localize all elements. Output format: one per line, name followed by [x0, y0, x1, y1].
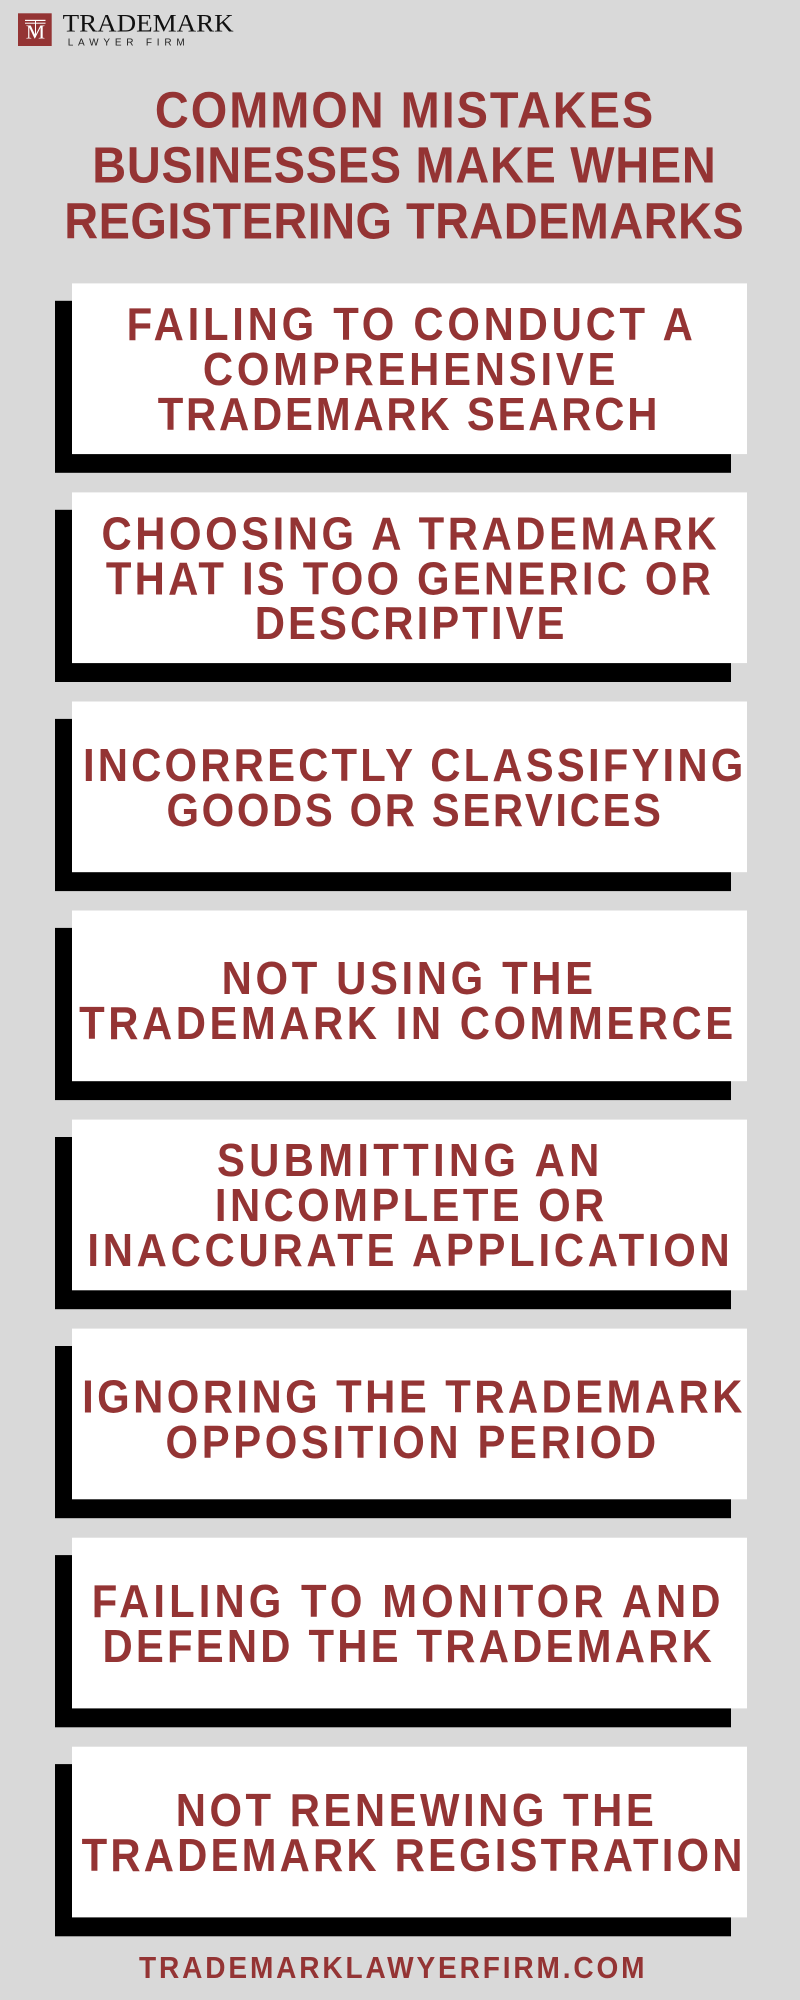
text: mistake 7: DEFEND THE TRADEMARK: [102, 1621, 712, 1672]
panel: mistake 6: [55, 1329, 747, 1518]
text: mistake 7: [92, 1576, 721, 1672]
logo: [18, 11, 234, 48]
title: REGISTERING TRADEMARKS: [64, 194, 744, 250]
icon: TM monogram: [18, 13, 52, 46]
panel: mistake 3: [55, 702, 747, 891]
panel: mistake 7: [55, 1538, 747, 1727]
panel: mistake 5: [55, 1120, 747, 1309]
text: mistake 8: NOT RENEWING THE: [176, 1785, 654, 1836]
panel: mistake 2: [55, 492, 747, 682]
text: mistake 3: [83, 740, 743, 836]
text: mistake 4: [79, 953, 733, 1049]
text: mistake 2: THAT IS TOO GENERIC OR: [106, 554, 711, 605]
text: mistake 3: INCORRECTLY CLASSIFYING: [83, 740, 743, 791]
panel: mistake 1: [55, 283, 747, 473]
text: mistake 5: [87, 1135, 730, 1276]
text: mistake 6: OPPOSITION PERIOD: [166, 1417, 656, 1468]
text: mistake 8: TRADEMARK REGISTRATION: [82, 1830, 742, 1881]
footer url: TRADEMARKLAWYERFIRM.COM: [139, 1951, 645, 1985]
icon: TM monogram: M: [26, 21, 45, 43]
text: mistake 1: COMPREHENSIVE: [203, 344, 615, 395]
text: mistake 1: FAILING TO CONDUCT A: [127, 299, 693, 350]
panel: mistake 8: [55, 1747, 747, 1936]
text: mistake 2: CHOOSING A TRADEMARK: [101, 509, 717, 560]
text: mistake 8: [82, 1785, 742, 1881]
text: mistake 2: [101, 509, 717, 649]
text: mistake 4: NOT USING THE: [222, 953, 593, 1004]
title: COMMON MISTAKES: [155, 83, 653, 139]
text: mistake 5: SUBMITTING AN: [217, 1135, 599, 1186]
text: mistake 3: GOODS OR SERVICES: [167, 785, 661, 836]
text: mistake 7: FAILING TO MONITOR AND: [92, 1576, 721, 1627]
text: mistake 5: INCOMPLETE OR: [215, 1180, 604, 1231]
text: mistake 5: INACCURATE APPLICATION: [87, 1225, 730, 1276]
text: mistake 6: IGNORING THE TRADEMARK: [82, 1372, 743, 1423]
text: mistake 2: DESCRIPTIVE: [255, 598, 564, 649]
text: mistake 6: [82, 1372, 743, 1468]
panel: mistake 4: [55, 910, 747, 1100]
text: mistake 1: [127, 299, 693, 440]
title: BUSINESSES MAKE WHEN: [92, 138, 716, 194]
title: [64, 83, 744, 250]
text: mistake 1: TRADEMARK SEARCH: [158, 389, 657, 440]
logo tagline: LAWYER FIRM: [68, 37, 185, 48]
logo wordmark: TRADEMARK: [63, 11, 234, 38]
text: mistake 4: TRADEMARK IN COMMERCE: [79, 998, 733, 1049]
